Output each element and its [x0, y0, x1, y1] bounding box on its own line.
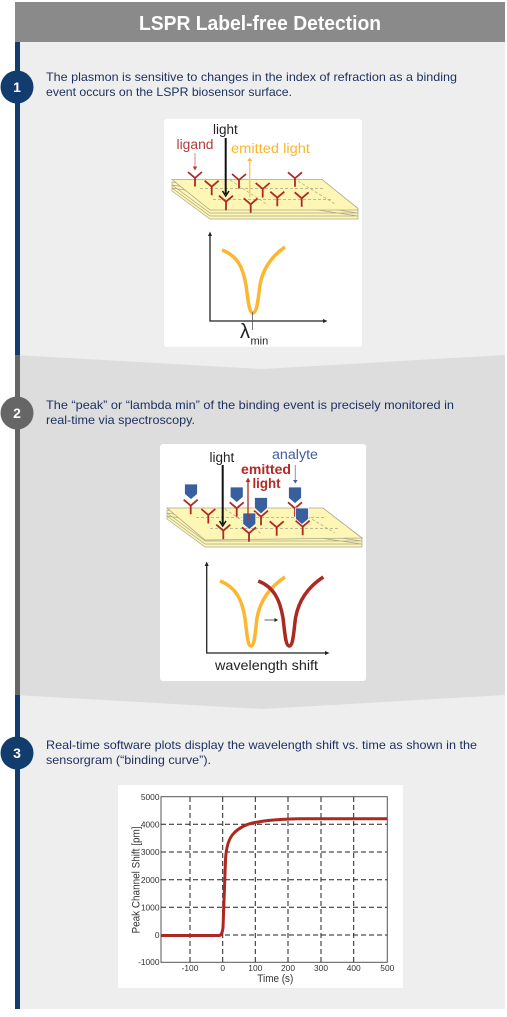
panel: step 2 diagram card — [160, 444, 366, 681]
title banner: LSPR Label-free Detection — [139, 13, 381, 35]
panel: step 1 background — [15, 42, 505, 372]
step 3 description: sensorgram (“binding curve”). — [46, 753, 211, 767]
x axis labels: 0 — [220, 963, 225, 973]
x axis labels: -100 — [182, 963, 199, 973]
panel: step 1 diagram card — [164, 119, 362, 348]
x axis labels — [182, 963, 395, 973]
step 3 number badge — [0, 736, 34, 770]
y axis labels: 0 — [155, 930, 160, 940]
chart: sensorgram binding curve — [130, 792, 395, 985]
arrow: emitted light — [246, 478, 250, 520]
label: light: light — [210, 450, 235, 465]
arrow: incoming light — [222, 138, 229, 196]
arrow: emitted light — [247, 158, 252, 197]
y axis labels: 3000 — [141, 847, 160, 857]
y axis labels: 5000 — [141, 792, 160, 802]
label: emitted light: light — [252, 475, 281, 491]
step 2 number badge: 2 — [13, 405, 21, 421]
panel: step 2 background — [15, 355, 505, 709]
step 2 number badge — [0, 396, 34, 430]
chart: resonance dip: λ — [240, 321, 250, 343]
label: ligand: ligand — [176, 137, 214, 152]
label: emitted light: emitted light — [231, 141, 310, 156]
step 2 description — [46, 398, 454, 427]
step 2 description: The “peak” or “lambda min” of the binding event is precisely monitored in — [46, 398, 454, 412]
chart: resonance dip — [208, 232, 328, 348]
label: analyte: analyte — [272, 447, 318, 462]
x axis labels: 100 — [248, 963, 263, 973]
y axis labels: 2000 — [141, 875, 160, 885]
sensor plate with ligands and analytes — [167, 484, 362, 547]
step 3 description — [46, 738, 477, 767]
title banner — [15, 2, 505, 42]
step 1 description: The plasmon is sensitive to changes in the index of refraction as a binding — [46, 70, 457, 84]
panel: sensorgram card — [118, 785, 403, 988]
arrow: analyte — [293, 465, 298, 484]
timeline bar — [15, 42, 20, 1009]
panel: step 3 background — [15, 695, 505, 1009]
y axis labels — [138, 792, 160, 967]
arrow: incoming light — [220, 465, 226, 526]
x axis labels: 400 — [347, 963, 361, 973]
chart: resonance dip: min — [250, 336, 268, 348]
step 3 number badge: 3 — [13, 745, 21, 761]
x axis labels: 200 — [281, 963, 295, 973]
sensor plate with ligands — [172, 172, 358, 219]
x axis labels: 300 — [314, 963, 328, 973]
step 3 description: Real-time software plots display the wavelength shift vs. time as shown in the — [46, 738, 477, 752]
label: emitted light — [241, 461, 291, 491]
y axis labels: 1000 — [141, 902, 160, 912]
step 2 description: real-time via spectroscopy. — [46, 413, 195, 427]
step 1 number badge — [0, 70, 34, 104]
label: emitted light: emitted — [241, 461, 291, 477]
chart: wavelength shift: wavelength shift — [214, 657, 318, 673]
arrow: ligand — [193, 153, 197, 170]
x axis labels: 500 — [380, 963, 395, 973]
y axis labels: -1000 — [138, 957, 160, 967]
x axis title: Time (s) — [257, 973, 293, 985]
y axis title: Peak Channel Shift [pm] — [130, 826, 142, 934]
chart: wavelength shift — [205, 562, 330, 673]
step 1 description: event occurs on the LSPR biosensor surface. — [46, 85, 292, 99]
label: light: light — [213, 122, 238, 137]
step 1 number badge: 1 — [13, 79, 21, 95]
y axis labels: 4000 — [141, 820, 160, 830]
step 1 description — [46, 70, 457, 99]
